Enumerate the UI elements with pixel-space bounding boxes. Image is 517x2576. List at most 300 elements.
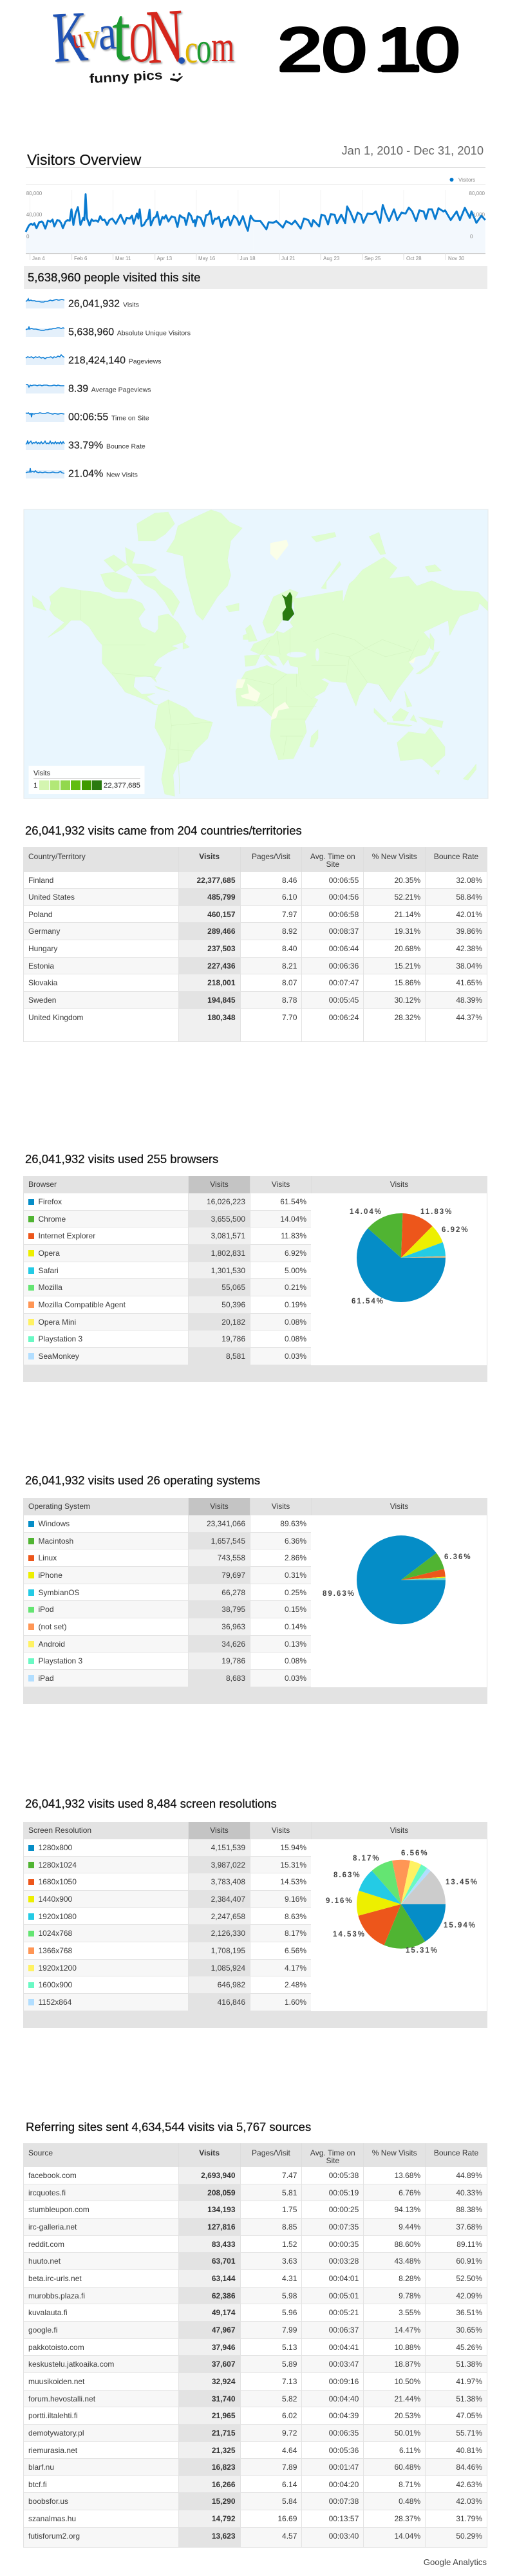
row: blarf.nu: 84.46% [456,2463,482,2472]
row: iPad: 0.03% [285,1674,306,1683]
row: szanalmas.hu: 14,792 [212,2514,236,2523]
metric: Visits [26,299,139,309]
row: muusikoiden.net: 7.13 [282,2377,297,2386]
row: Hungary: 00:06:44 [329,944,359,953]
row: 1680x1050 [24,1873,311,1891]
logo: Kuvaton.com: O [129,11,153,74]
row: SymbianOS [24,1584,311,1601]
row: beta.irc-urls.net: beta.irc-urls.net [28,2274,82,2283]
table header: referring sites [24,2143,487,2167]
row: futisforum2.org: futisforum2.org [28,2532,80,2541]
row: huuto.net: 00:03:28 [329,2257,359,2266]
row: szanalmas.hu: szanalmas.hu [28,2514,76,2523]
pie chart: screen resolutions: 6.56% [401,1850,429,1857]
table: operating systems [23,1498,487,1704]
heading: referring sites: Referring sites sent 4,634,544 visits via 5,767 sources [26,2120,311,2134]
row: 1440x900: 9.16% [285,1895,306,1904]
row: 1280x1024: 15.31% [280,1861,306,1870]
row: futisforum2.org: 00:03:40 [329,2532,359,2541]
row: Macintosh: 6.36% [285,1537,306,1546]
row: 1920x1200 [24,1960,311,1976]
row: Android: Android [39,1640,65,1649]
row: Macintosh: Macintosh [39,1537,73,1546]
metric: New Visits: New Visits [106,471,138,479]
row: muusikoiden.net: muusikoiden.net [28,2377,84,2386]
row: 1920x1080: 2,247,658 [211,1912,245,1921]
y axis labels: 0 [470,234,473,240]
row: Sweden: 48.39% [456,996,482,1005]
row: irc-galleria.net: 127,816 [207,2222,236,2231]
row: Linux [24,1549,311,1567]
row: blarf.nu [24,2459,487,2476]
row: Finland: 00:06:55 [329,876,359,885]
row: google.fi [24,2322,487,2339]
row: huuto.net: 3.63 [282,2257,297,2266]
row: demotywatory.pl: 50.01% [394,2429,420,2438]
row: murobbs.plaza.fi: 9.78% [399,2291,420,2300]
x axis with month labels: Nov 30 [448,256,465,261]
row: iPhone: 79,697 [221,1571,245,1580]
row: Opera: 6.92% [285,1249,306,1258]
row: stumbleupon.com: 1.75 [282,2205,297,2214]
row: reddit.com: reddit.com [28,2240,64,2249]
row: blarf.nu: 16,823 [212,2463,236,2472]
row: 1600x900: 2.48% [285,1980,306,1989]
row: United Kingdom: 28.32% [394,1013,420,1022]
row: 1280x800: 15.94% [280,1843,306,1852]
row: google.fi: 7.99 [282,2325,297,2334]
table header: countries: Bounce Rate [434,852,478,861]
row: irc-galleria.net: 37.68% [456,2222,482,2231]
row: keskustelu.jatkoaika.com: 18.87% [394,2360,420,2369]
row: Poland: 42.01% [456,910,482,919]
row: facebook.com: 00:05:38 [329,2171,359,2180]
row: not set [24,1618,311,1636]
row: Poland: Poland [28,910,52,919]
row: Slovakia: 218,001 [207,978,236,987]
icon: smiley [170,73,183,82]
row: ircquotes.fi: ircquotes.fi [28,2188,66,2197]
row: iPod: 38,795 [221,1605,245,1614]
row: United States: 52.21% [394,893,420,902]
row: Playstation 3: 0.08% [285,1334,306,1343]
row: Playstation 3 [24,1653,311,1670]
table header: browsers [24,1176,487,1193]
row: Firefox: 16,026,223 [207,1197,245,1206]
pie chart: operating systems [323,1553,472,1602]
row: Playstation 3: 0.08% [285,1656,306,1665]
row: boobsfor.us: 0.48% [399,2497,420,2506]
table header: browsers: Browser [28,1180,57,1189]
table header: operating systems: Operating System [28,1502,90,1511]
row: irc-galleria.net: 8.85 [282,2222,297,2231]
pie chart: operating systems: 6.36% [444,1553,472,1561]
row: Germany: 8.92 [282,927,297,936]
table header: countries: Site [326,860,339,869]
row: btcf.fi: btcf.fi [28,2480,47,2489]
metric: Average Pageviews: Average Pageviews [91,386,151,394]
row: 1280x1024: 3,987,022 [211,1861,245,1870]
row: muusikoiden.net [24,2373,487,2391]
row: ircquotes.fi: 6.76% [399,2188,420,2197]
table: screen resolutions [23,1822,487,2028]
row: reddit.com: 89.11% [456,2240,482,2249]
row: keskustelu.jatkoaika.com: 37,607 [212,2360,236,2369]
row: Playstation 3: 19,786 [221,1656,245,1665]
row: 1440x900: 1440x900 [39,1895,72,1904]
row: futisforum2.org: 4.57 [282,2532,297,2541]
x axis with month labels: May 16 [198,256,216,261]
y axis labels: 40,000 [469,212,485,218]
row: huuto.net: 63,701 [212,2257,236,2266]
row: United Kingdom: 180,348 [207,1013,236,1022]
heading: countries: 26,041,932 visits came from 204 countries/territories [25,824,302,837]
row: irc-galleria.net: 9.44% [399,2222,420,2231]
table header: browsers: Visits [272,1180,290,1189]
table header: operating systems: Visits [272,1502,290,1511]
row: keskustelu.jatkoaika.com [24,2356,487,2373]
row: United States: 58.84% [456,893,482,902]
row: btcf.fi: 8.71% [399,2480,420,2489]
row: Windows: 89.63% [280,1519,306,1528]
row: Sweden: 8.78 [282,996,297,1005]
row: Hungary: 20.68% [394,944,420,953]
row: szanalmas.hu [24,2510,487,2528]
row: irc-galleria.net: 00:07:35 [329,2222,359,2231]
row: szanalmas.hu: 16.69 [277,2514,297,2523]
row: portti.iltalehti.fi: 6.02 [282,2411,297,2420]
row: 1024x768 [24,1925,311,1942]
x axis with month labels: Jan 4 [32,256,45,261]
pie chart: screen resolutions: 15.31% [406,1947,438,1955]
metric: New Visits [26,468,138,479]
row: 1366x768 [24,1942,311,1960]
row: Chrome [24,1211,311,1227]
row: Hungary: 237,503 [207,944,236,953]
row: Mozilla: 55,065 [221,1283,245,1292]
row: forum.hevostalli.net: 5.82 [282,2394,297,2403]
row: 1366x768: 1,708,195 [211,1946,245,1955]
row: forum.hevostalli.net: 51.38% [456,2394,482,2403]
row: muusikoiden.net: 00:09:16 [329,2377,359,2386]
row: 1680x1050: 1680x1050 [39,1877,77,1886]
Finland highlighted [282,592,294,621]
table header: countries [24,847,487,872]
row: 1920x1200: 4.17% [285,1964,306,1973]
row: 1680x1050: 14.53% [280,1877,306,1886]
row: iPhone: 0.31% [285,1571,306,1580]
line chart: visitors over 2010 [26,177,485,261]
row: blarf.nu: 60.48% [394,2463,420,2472]
land masses [32,510,487,796]
row: murobbs.plaza.fi: 5.98 [282,2291,297,2300]
row: reddit.com: 00:00:35 [329,2240,359,2249]
heading: operating systems: 26,041,932 visits used 26 operating systems [25,1473,260,1487]
row: 1440x900 [24,1891,311,1908]
table header: countries: Avg. Time on [310,852,355,861]
row: 1366x768: 6.56% [285,1946,306,1955]
row: riemurasia.net [24,2442,487,2459]
x axis with month labels: Mar 11 [115,256,131,261]
row: pakkotoisto.com: 45.26% [456,2343,482,2352]
row: SymbianOS: SymbianOS [39,1588,80,1597]
row: pakkotoisto.com: 37,946 [212,2343,236,2352]
x axis with month labels: Sep 25 [364,256,381,261]
row: Safari: 5.00% [285,1266,306,1275]
row: SeaMonkey: SeaMonkey [39,1352,79,1361]
logo tagline: funny pics: funny pics [89,68,163,86]
table: browsers [23,1176,487,1382]
row: muusikoiden.net: 10.50% [394,2377,420,2386]
table header: screen resolutions: Visits [272,1826,290,1835]
row: riemurasia.net: 00:05:36 [329,2446,359,2455]
row: Finland: Finland [28,876,53,885]
table header: browsers: Visits [390,1180,408,1189]
row: stumbleupon.com: 94.13% [394,2205,420,2214]
row: beta.irc-urls.net: 52.50% [456,2274,482,2283]
row: demotywatory.pl: 00:06:35 [329,2429,359,2438]
row: Slovakia: 41.65% [456,978,482,987]
row: huuto.net: 43.48% [394,2257,420,2266]
x axis with month labels: Oct 28 [406,256,422,261]
row: demotywatory.pl [24,2425,487,2442]
map legend: 22,377,685 [104,782,140,790]
row: 1920x1080 [24,1908,311,1925]
row: ircquotes.fi: 40.33% [456,2188,482,2197]
pie chart: browsers: 11.83% [420,1208,453,1216]
row: kuvalauta.fi [24,2304,487,2322]
row: Firefox: Firefox [39,1197,62,1206]
row: facebook.com: 13.68% [394,2171,420,2180]
x axis with month labels: Apr 13 [157,256,173,261]
row: 1366x768: 1366x768 [39,1946,72,1955]
metric: Pageviews: 218,424,140 [68,355,126,366]
row: Estonia: Estonia [28,961,54,971]
row: pakkotoisto.com: 10.88% [394,2343,420,2352]
row: ircquotes.fi: 208,059 [207,2188,236,2197]
pie chart: browsers: 61.54% [352,1298,384,1305]
x axis with month labels: Jul 21 [281,256,296,261]
row: murobbs.plaza.fi [24,2287,487,2304]
row: Germany: 00:08:37 [329,927,359,936]
row: pakkotoisto.com: 00:04:41 [329,2343,359,2352]
row: Android: 0.13% [285,1640,306,1649]
map legend: 1 [33,782,37,790]
row: Safari [24,1262,311,1279]
pie chart: browsers: 14.04% [350,1208,382,1216]
row: szanalmas.hu: 31.79% [456,2514,482,2523]
row: reddit.com [24,2236,487,2253]
logo: Kuvaton.com: m [211,22,234,71]
row: stumbleupon.com: 00:00:25 [329,2205,359,2214]
pie chart: screen resolutions: 8.17% [353,1855,381,1862]
table header: operating systems: Visits [390,1502,408,1511]
table header: referring sites: Visits [199,2148,220,2157]
row: SeaMonkey: 8,581 [226,1352,245,1361]
row: Germany: Germany [28,927,60,936]
row: iPod: iPod [39,1605,54,1614]
map legend [28,766,144,794]
row: 1280x800 [24,1839,311,1857]
row: facebook.com: 44.89% [456,2171,482,2180]
row: futisforum2.org [24,2528,487,2548]
row: Playstation 3: 19,786 [221,1334,245,1343]
table header: screen resolutions: Visits [390,1826,408,1835]
row: not set: (not set) [39,1622,67,1631]
row: Germany: 39.86% [456,927,482,936]
row: Slovakia: 15.86% [394,978,420,987]
row: btcf.fi: 00:04:20 [329,2480,359,2489]
y axis labels: 0 [26,234,30,240]
row: 1920x1080: 8.63% [285,1912,306,1921]
logo tagline: funny pics [89,68,183,86]
row: Sweden: 30.12% [394,996,420,1005]
row: futisforum2.org: 14.04% [394,2532,420,2541]
row: blarf.nu: 7.89 [282,2463,297,2472]
table header: referring sites: % New Visits [372,2148,417,2157]
row: United States: 00:04:56 [329,893,359,902]
row: keskustelu.jatkoaika.com: 00:03:47 [329,2360,359,2369]
row: Linux: 2.86% [285,1553,306,1562]
heading: browsers: 26,041,932 visits used 255 browsers [25,1152,218,1166]
table header: screen resolutions: Screen Resolution [28,1826,91,1835]
row: pakkotoisto.com: pakkotoisto.com [28,2343,84,2352]
table header: countries: Country/Territory [28,852,86,861]
row: reddit.com: 88.60% [394,2240,420,2249]
row: kuvalauta.fi: 49,174 [212,2308,236,2317]
row: facebook.com: 2,693,940 [201,2171,236,2180]
row: SymbianOS: 0.25% [285,1588,306,1597]
row: riemurasia.net: 4.64 [282,2446,297,2455]
metric: Time on Site: 00:06:55 [68,412,108,422]
metric: Visits: 26,041,932 [68,299,120,309]
row: facebook.com [24,2167,487,2184]
metric: Time on Site: Time on Site [111,415,149,422]
pie chart: operating systems: 89.63% [323,1590,355,1598]
row: Macintosh: 1,657,545 [211,1537,245,1546]
table header: screen resolutions: Visits [210,1826,229,1835]
row: Sweden: 00:05:45 [329,996,359,1005]
row: Opera: 1,802,831 [211,1249,245,1258]
row: boobsfor.us: 00:07:38 [329,2497,359,2506]
row: portti.iltalehti.fi [24,2407,487,2425]
row: Poland: 00:06:58 [329,910,359,919]
row: beta.irc-urls.net: 00:04:01 [329,2274,359,2283]
row: google.fi: 14.47% [394,2325,420,2334]
y axis labels: 80,000 [469,191,485,196]
row: blarf.nu: blarf.nu [28,2463,54,2472]
x axis with month labels: Jun 18 [240,256,256,261]
row: 1920x1200: 1920x1200 [39,1964,77,1973]
row: Opera Mini: 0.08% [285,1318,306,1327]
row: beta.irc-urls.net: 8.28% [399,2274,420,2283]
row: not set: 0.14% [285,1622,306,1631]
row: muusikoiden.net: 41.97% [456,2377,482,2386]
row: Germany [24,923,487,940]
row: Estonia: 8.21 [282,961,297,971]
metric: Time on Site [26,412,149,422]
row: Slovakia: 00:07:47 [329,978,359,987]
row: Finland [24,872,487,889]
row: Estonia: 15.21% [394,961,420,971]
row: huuto.net [24,2253,487,2270]
row: portti.iltalehti.fi: 00:04:39 [329,2411,359,2420]
row: boobsfor.us [24,2493,487,2510]
row: 1440x900: 2,384,407 [211,1895,245,1904]
pie chart: screen resolutions: 8.63% [334,1871,361,1879]
row: portti.iltalehti.fi: 20.53% [394,2411,420,2420]
row: Slovakia [24,974,487,992]
metric: Average Pageviews: 8.39 [68,384,88,394]
row: btcf.fi [24,2476,487,2493]
row: google.fi: 47,967 [212,2325,236,2334]
row: ircquotes.fi: 00:05:19 [329,2188,359,2197]
chart legend: Visitors [458,177,475,183]
footer: Google Analytics: Google Analytics [424,2557,487,2567]
row: Hungary: 8.40 [282,944,297,953]
row: facebook.com: 7.47 [282,2171,297,2180]
x axis with month labels: Feb 6 [74,256,88,261]
row: United States [24,889,487,906]
row: iPhone: iPhone [39,1571,62,1580]
row: iPod [24,1601,311,1618]
row: stumbleupon.com: 88.38% [456,2205,482,2214]
row: stumbleupon.com [24,2201,487,2219]
row: boobsfor.us: 15,290 [212,2497,236,2506]
table footer [24,1365,487,1382]
table footer [24,1687,487,1704]
row: Sweden: 194,845 [207,996,236,1005]
row: huuto.net: 60.91% [456,2257,482,2266]
row: 1920x1200: 1,085,924 [211,1964,245,1973]
row: google.fi: 30.65% [456,2325,482,2334]
heading: screen resolutions: 26,041,932 visits used 8,484 screen resolutions [25,1797,277,1810]
row: Hungary [24,940,487,958]
table header: operating systems: Visits [210,1502,229,1511]
row: irc-galleria.net [24,2219,487,2236]
row: Poland: 460,157 [207,910,236,919]
row: SymbianOS: 66,278 [221,1588,245,1597]
row: 1152x864: 1152x864 [39,1998,71,2007]
row: Opera: Opera [39,1249,60,1258]
row: btcf.fi: 16,266 [212,2480,236,2489]
row: iPad: iPad [39,1674,54,1683]
row: portti.iltalehti.fi: 47.05% [456,2411,482,2420]
row: huuto.net: huuto.net [28,2257,61,2266]
row: SeaMonkey: 0.03% [285,1352,306,1361]
row: forum.hevostalli.net [24,2391,487,2407]
table header: countries: Visits [199,852,220,861]
row: keskustelu.jatkoaika.com: keskustelu.jatkoaika.com [28,2360,114,2369]
row: ircquotes.fi: 5.81 [282,2188,297,2197]
row: 1280x800: 4,151,539 [211,1843,245,1852]
row: 1152x864: 416,846 [218,1998,245,2007]
y axis labels: 40,000 [26,212,42,218]
row: United Kingdom: 44.37% [456,1013,482,1022]
row: Hungary: Hungary [28,944,57,953]
row: 1920x1080: 1920x1080 [39,1912,77,1921]
metric: Bounce Rate: Bounce Rate [106,443,146,451]
row: 1024x768: 8.17% [285,1929,306,1938]
pie chart: screen resolutions: 14.53% [333,1931,366,1938]
table header: referring sites: Site [326,2156,339,2165]
row: United Kingdom [24,1009,487,1042]
row: Internet Explorer: 3,081,571 [211,1231,245,1240]
low-traffic countries [236,540,416,720]
metric: Absolute Unique Visitors: Absolute Unique Visitors [117,330,191,337]
row: Finland: 20.35% [394,876,420,885]
row: riemurasia.net: 21,325 [212,2446,236,2455]
